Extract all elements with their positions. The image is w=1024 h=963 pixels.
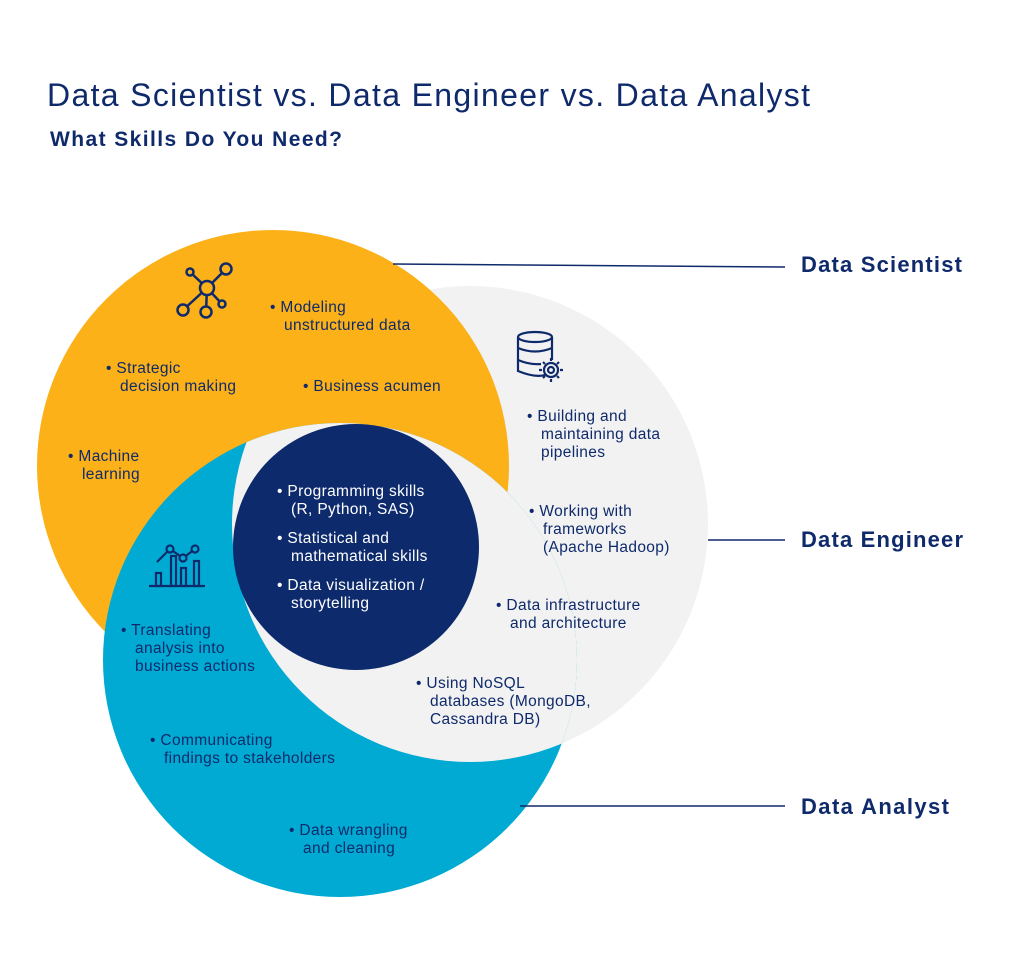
analyst skills: • Communicating [150,732,273,749]
analyst skills: and cleaning [303,840,395,857]
engineer skills: (Apache Hadoop) [543,539,670,556]
scientist skills: • Modeling [270,299,346,316]
scientist skills: learning [82,466,140,483]
analyst skills: business actions [135,658,255,675]
label: Data Analyst: Data Analyst [801,794,950,819]
engineer skills: pipelines [541,444,605,461]
engineer skills: • Building and [527,408,627,425]
shared skills: storytelling [291,595,369,612]
engineer skills: maintaining data [541,426,660,443]
shared skills: mathematical skills [291,548,428,565]
icon: database gear [518,332,563,382]
engineer skills: frameworks [543,521,627,538]
engineer skills [416,408,670,728]
scientist skills: • Business acumen [303,378,441,395]
engineer skills: and architecture [510,615,627,632]
shared skills [277,483,428,612]
analyst skills: • Data wrangling [289,822,408,839]
engineer skills: Cassandra DB) [430,711,541,728]
icon: chart [149,546,205,586]
title: Data Scientist vs. Data Engineer vs. Data Analyst [47,77,810,113]
icon: network [178,264,232,318]
scientist skills: unstructured data [284,317,411,334]
analyst skills: analysis into [135,640,225,657]
engineer skills: databases (MongoDB, [430,693,591,710]
analyst skills: findings to stakeholders [164,750,335,767]
engineer skills: • Using NoSQL [416,675,525,692]
shared skills: • Programming skills [277,483,425,500]
shared skills: • Data visualization / [277,577,425,594]
analyst skills: • Translating [121,622,211,639]
scientist skills: • Machine [68,448,139,465]
shared skills: • Statistical and [277,530,389,547]
scientist skills: • Strategic [106,360,181,377]
scientist skills: decision making [120,378,236,395]
label: Data Scientist: Data Scientist [801,252,963,277]
engineer skills: • Working with [529,503,632,520]
subtitle: What Skills Do You Need? [50,128,342,151]
shared skills: (R, Python, SAS) [291,501,415,518]
label: Data Engineer: Data Engineer [801,527,963,552]
analyst skills [121,622,408,857]
scientist skills [68,299,441,483]
engineer skills: • Data infrastructure [496,597,641,614]
connector lines [393,264,785,806]
venn diagram [37,230,708,897]
